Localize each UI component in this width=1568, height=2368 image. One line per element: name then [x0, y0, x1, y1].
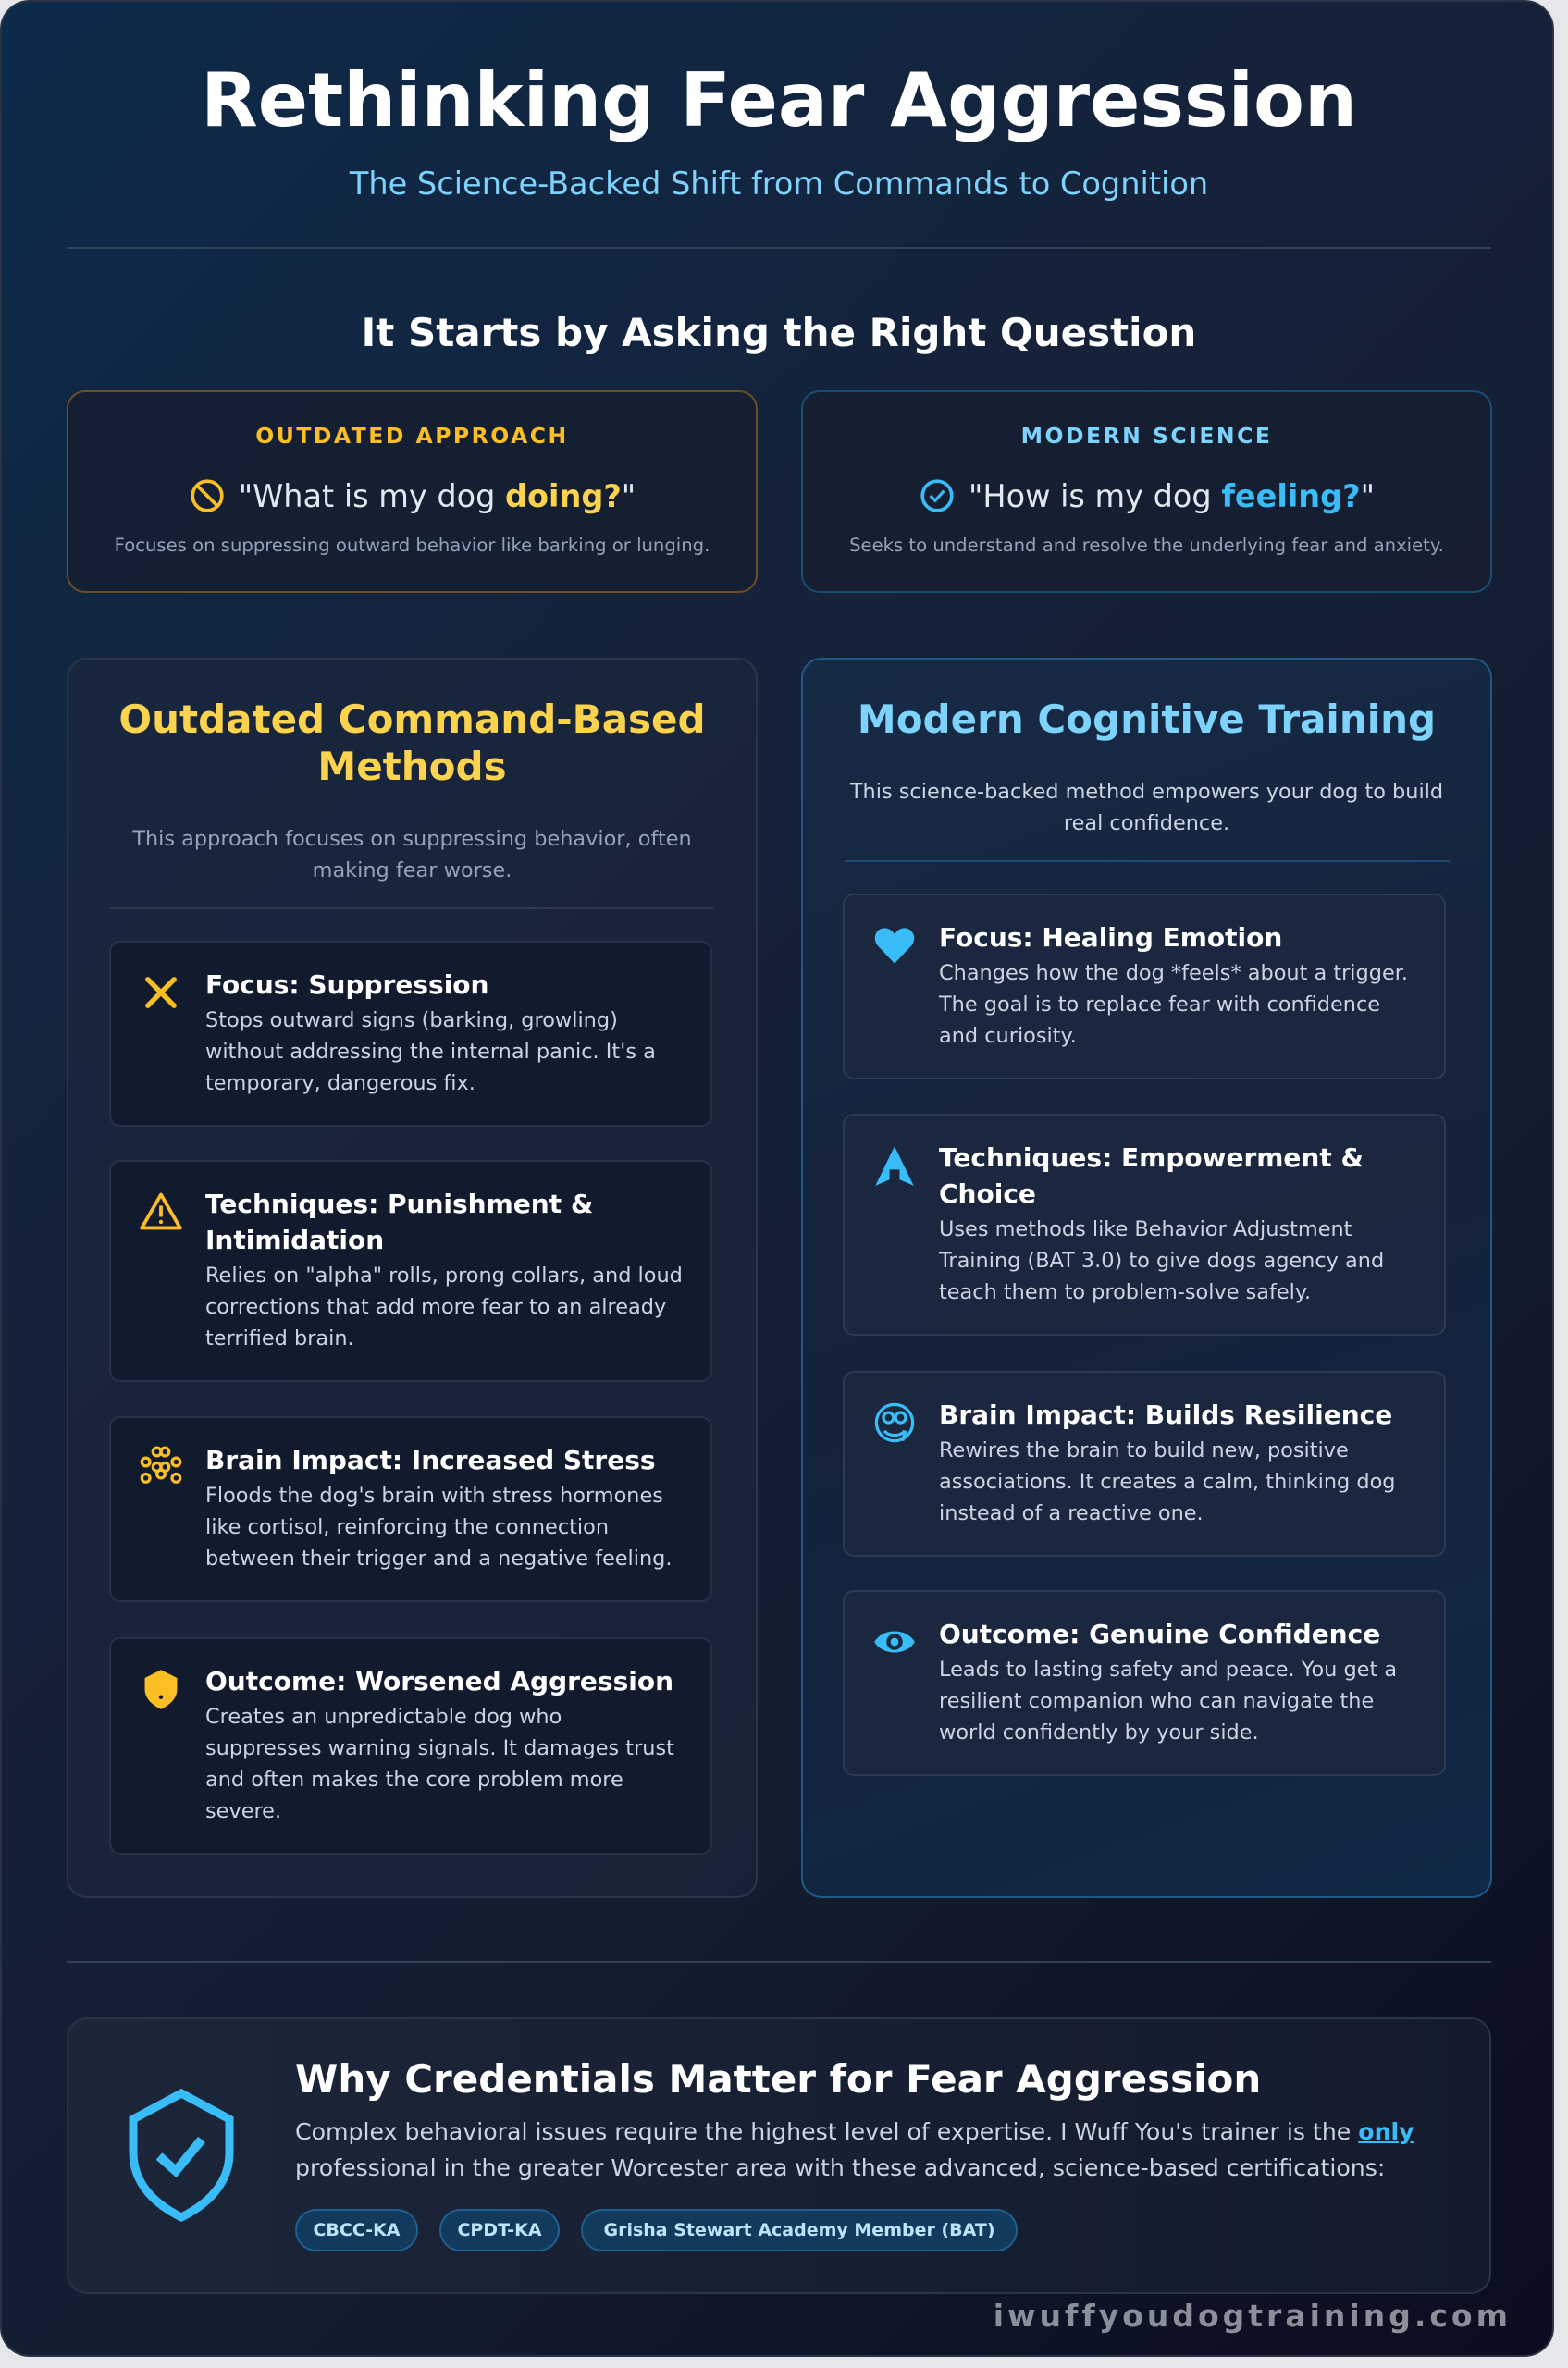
card: empowerment [843, 1114, 1446, 1336]
pill: Grisha Stewart: Grisha Stewart Academy Member (BAT) [603, 2220, 995, 2240]
description: This approach focuses on suppressing behavior, often making fear worse. [132, 827, 692, 882]
heading: outdated methods: Methods [317, 744, 507, 789]
card: healing emotion: Changes how the dog *feels* about a trigger. The goal is to replace fear with confidence and curiosity. [939, 961, 1408, 1048]
card: resilience: Brain Impact: Builds Resilience [939, 1400, 1392, 1430]
icon: heart [875, 928, 914, 964]
icon: eye [874, 1632, 915, 1652]
pill: CPDT-KA: CPDT-KA [457, 2220, 542, 2240]
pill: CBCC-KA [295, 2209, 418, 2251]
quote: doing: "What is my dog doing?" [239, 477, 636, 514]
card: punishment: Relies on "alpha" rolls, prong collars, and loud corrections that add more fear to an already terrified brain. [205, 1264, 683, 1350]
panel: modern science question [801, 390, 1492, 593]
card: focus suppression: Stops outward signs (barking, growling) without addressing the internal panic. It's a temporary, dangerous fix. [205, 1008, 656, 1095]
card: resilience: Rewires the brain to build new, positive associations. It creates a calm, thinking dog instead of a reactive one. [939, 1438, 1396, 1525]
panel: outdated approach question: OUTDATED APPROACH [255, 423, 569, 449]
panel: modern cognitive training [801, 658, 1492, 1898]
icon: shield [144, 1670, 178, 1709]
card: worsened aggression: Creates an unpredictable dog who [205, 1705, 562, 1729]
icon: x [145, 977, 177, 1008]
heading: outdated methods: Outdated Command-Based [118, 697, 706, 742]
card: genuine confidence [843, 1590, 1446, 1776]
card: increased stress: Brain Impact: Increased Stress [205, 1445, 656, 1475]
card: genuine confidence: Outcome: Genuine Confidence [939, 1619, 1380, 1649]
card: focus suppression: Focus: Suppression [205, 969, 488, 1000]
title: Rethinking Fear Aggression [201, 57, 1357, 143]
icon: cells [141, 1447, 181, 1484]
panel: outdated approach question [67, 390, 758, 593]
pill: CPDT-KA [439, 2209, 560, 2251]
quote: feeling: "How is my dog feeling?" [969, 477, 1375, 514]
card: worsened aggression: Outcome: Worsened Aggression [205, 1666, 673, 1696]
card: worsened aggression [109, 1637, 712, 1855]
icon: brain owl [875, 1402, 914, 1443]
card: punishment [109, 1160, 712, 1382]
icon: prohibited [191, 479, 224, 512]
heading: modern training: Modern Cognitive Training [858, 697, 1436, 742]
card: resilience [843, 1371, 1446, 1557]
card: empowerment: Uses methods like Behavior Adjustment Training (BAT 3.0) to give dogs agency and teach them to problem-solve safely. [939, 1217, 1384, 1304]
panel: outdated approach question: Focuses on suppressing outward behavior like barking or lunging. [115, 535, 710, 556]
card: focus suppression [109, 941, 712, 1127]
panel: outdated methods [67, 658, 758, 1898]
pill: CBCC-KA: CBCC-KA [313, 2220, 401, 2240]
pill: Grisha Stewart [581, 2209, 1018, 2251]
icon: arrow up [875, 1146, 914, 1186]
card: healing emotion: Focus: Healing Emotion [939, 922, 1282, 953]
panel: modern science question: Seeks to understand and resolve the underlying fear and anxiety. [849, 535, 1444, 556]
heading: outdated methods [118, 697, 706, 789]
card: worsened aggression: suppresses warning signals. It damages trust and often makes the core problem more severe. [205, 1736, 674, 1823]
website footer: iwuffyoudogtraining.com [994, 2298, 1512, 2334]
card: increased stress: Floods the dog's brain with stress hormones like cortisol, reinforcing the connection between their trigger and a negative feeling. [205, 1484, 672, 1571]
card: punishment: Techniques: Punishment & Intimidation [205, 1189, 593, 1255]
text: credentials body: Complex behavioral issues require the highest level of expertise. I Wuff You's trainer is the only professional in the greater Worcester area with these advanced, science-based certifications: [295, 2118, 1414, 2181]
icon: shield check [130, 2089, 233, 2222]
description: This science-backed method empowers your dog to build real confidence. [850, 780, 1443, 835]
icon: warning [140, 1193, 182, 1230]
panel: modern science question: MODERN SCIENCE [1021, 423, 1272, 449]
subtitle: The Science-Backed Shift from Commands to Cognition [350, 166, 1208, 202]
card: empowerment: Techniques: Empowerment & Choice [939, 1142, 1364, 1209]
card: healing emotion [843, 894, 1446, 1079]
card: genuine confidence: Leads to lasting safety and peace. You get a resilient companion who can navigate the world confidently by your side. [939, 1658, 1397, 1745]
card: increased stress [109, 1416, 712, 1602]
heading: credentials: Why Credentials Matter for Fear Aggression [295, 2056, 1261, 2102]
section heading: It Starts by Asking the Right Question [362, 310, 1196, 355]
icon: check circle [920, 479, 954, 512]
panel: credentials [67, 2017, 1491, 2294]
